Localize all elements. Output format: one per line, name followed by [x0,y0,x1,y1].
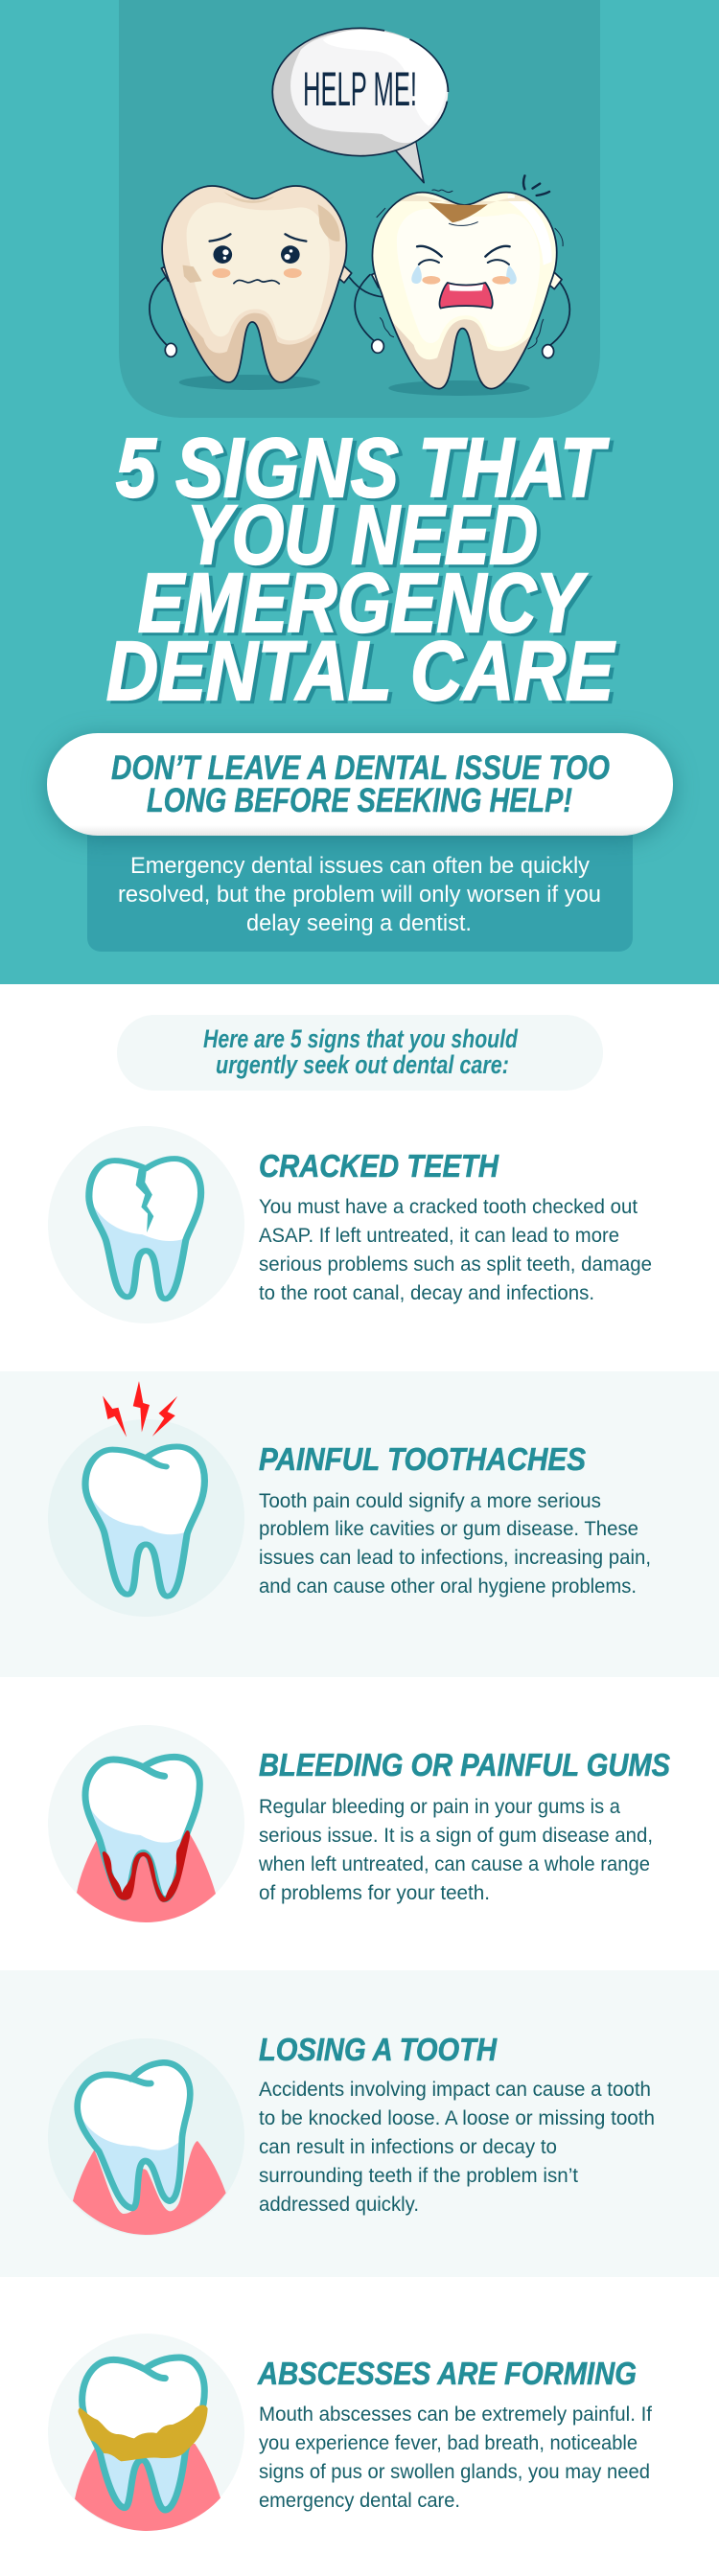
body text: Tooth pain could signify a more serious [259,1489,601,1512]
panel: losing a tooth [0,1970,719,2277]
icon: lightning bolts [103,1381,177,1438]
body text: Accidents involving impact can cause a tooth [259,2078,651,2101]
body text: signs of pus or swollen glands, you may need [259,2460,650,2483]
body text [258,1795,653,1904]
left tooth [156,179,352,382]
body text: serious problems such as split teeth, damage [259,1253,652,1276]
subtitle pill: DON’T LEAVE A DENTAL ISSUE TOO [111,749,610,787]
body text: serious issue. It is a sign of gum disease and, [259,1824,653,1847]
ground shadows [179,375,530,396]
body text: issues can lead to infections, increasing pain, [259,1546,651,1569]
panel: painful toothaches [0,1371,719,1677]
illustration: two sad teeth [150,28,569,396]
icon: bleeding gums [48,1725,244,1922]
crying face [411,246,517,309]
cavity [429,202,488,222]
header panel [0,0,719,984]
description box: resolved, but the problem will only worsen if you [118,882,601,908]
body text: emergency dental care. [259,2489,460,2512]
body text: you experience fever, bad breath, noticeable [259,2431,638,2454]
speech bubble [272,28,448,183]
body text: ASAP. If left untreated, it can lead to more [259,1224,619,1247]
heading: LOSING A TOOTH [259,2032,498,2067]
description box: delay seeing a dentist. [246,910,472,936]
blood [103,1830,190,1902]
body text: and can cause other oral hygiene problems. [259,1575,637,1598]
title [106,422,616,718]
icon: aching tooth [48,1381,244,1617]
intro pill [117,1015,603,1091]
description box: Emergency dental issues can often be quickly [130,853,591,879]
left tooth face [210,234,306,284]
panel: cracked teeth [48,1126,652,1323]
right tooth [366,175,563,389]
body text: to be knocked loose. A loose or missing tooth [259,2106,655,2129]
intro pill: urgently seek out dental care: [216,1050,509,1079]
icon: tooth with abscess [48,2334,244,2531]
description box [87,805,633,952]
title: DENTAL CARE [106,625,616,718]
heading: ABSCESSES ARE FORMING [257,2356,637,2391]
panel: bleeding or painful gums [48,1725,670,1922]
arms [150,275,569,347]
body text: to the root canal, decay and infections. [259,1281,594,1304]
body text: can result in infections or decay to [259,2135,557,2158]
subtitle pill [47,733,673,836]
body text: Regular bleeding or pain in your gums is a [259,1795,620,1818]
hands [165,339,554,358]
body text: problem like cavities or gum disease. These [259,1517,638,1540]
body text [259,1195,652,1304]
icon: loose tooth [48,2038,244,2236]
title: EMERGENCY [138,557,588,650]
body text: Mouth abscesses can be extremely painful. If [259,2403,652,2426]
body text: surrounding teeth if the problem isn’t [259,2164,578,2187]
heading: PAINFUL TOOTHACHES [259,1441,586,1477]
panel: abscesses are forming [48,2334,652,2531]
worry marks [377,208,563,349]
body text [259,2403,652,2512]
intro pill: Here are 5 signs that you should [203,1024,518,1053]
body text: of problems for your teeth. [259,1881,490,1904]
heading: CRACKED TEETH [259,1148,499,1184]
heading: BLEEDING OR PAINFUL GUMS [259,1747,670,1782]
title: 5 SIGNS THAT [116,422,610,515]
illustration panel [119,0,600,418]
body text: addressed quickly. [259,2193,419,2216]
title: YOU NEED [187,489,538,582]
help me text: HELP ME! [303,62,417,116]
body text: when left untreated, can cause a whole range [258,1852,650,1875]
body text [259,2078,655,2216]
body text [259,1489,651,1598]
subtitle pill: LONG BEFORE SEEKING HELP! [147,782,572,819]
icon: cracked tooth [48,1126,244,1323]
pus [79,2405,208,2461]
body text: You must have a cracked tooth checked out [259,1195,638,1218]
